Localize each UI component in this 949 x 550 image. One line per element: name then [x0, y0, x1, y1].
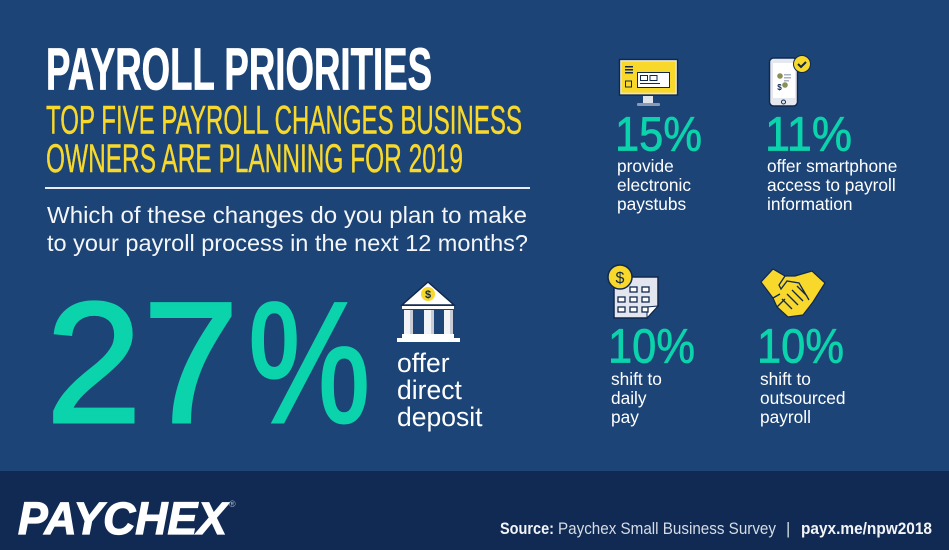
- stat: 10% outsourced payroll: [757, 320, 846, 427]
- stat: 15%: paystubs: [617, 194, 687, 214]
- stat: 15%: [615, 108, 702, 214]
- stat: 10% daily pay: [608, 320, 695, 427]
- stat: 10% outsourced payroll: payroll: [760, 407, 811, 427]
- question: to your payroll process in the next 12 months?: [47, 230, 528, 256]
- stat: 11%: 11%: [765, 108, 852, 162]
- stat: 15%: electronic: [617, 175, 691, 195]
- subtitle: TOP FIVE PAYROLL CHANGES BUSINESS: [46, 99, 522, 143]
- question: [47, 202, 528, 256]
- stat: 10% daily pay: shift to: [611, 369, 662, 389]
- icon: handshake: [761, 269, 825, 317]
- big stat: 27%: [46, 267, 370, 460]
- icon: calendar: $: [616, 270, 625, 287]
- subtitle: OWNERS ARE PLANNING FOR 2019: [46, 137, 463, 181]
- footer band: [0, 471, 949, 550]
- stat: 10% daily pay: 10%: [608, 320, 695, 374]
- stat: 11%: offer smartphone: [767, 156, 897, 176]
- stat: 10% outsourced payroll: outsourced: [760, 388, 846, 408]
- icon: smartphone: [770, 56, 810, 106]
- stat: 10% outsourced payroll: 10%: [757, 320, 844, 374]
- stat: 15%: 15%: [615, 108, 702, 162]
- label: direct deposit: offer: [397, 348, 450, 378]
- stat: 11%: access to payroll: [767, 175, 896, 195]
- icon: calendar: [608, 265, 658, 318]
- stat: 10% outsourced payroll: shift to: [760, 369, 811, 389]
- label: direct deposit: deposit: [397, 402, 483, 432]
- subtitle: [46, 99, 522, 181]
- icon: smartphone: $: [777, 83, 782, 92]
- logo: Paychex: ®: [229, 499, 236, 509]
- stat: 11%: information: [767, 194, 852, 214]
- stat: 15%: provide: [617, 156, 674, 176]
- stat: 11%: [765, 108, 897, 214]
- big stat: 27%: %: [248, 267, 370, 460]
- question: Which of these changes do you plan to make: [47, 202, 527, 228]
- source line: |: [786, 520, 790, 538]
- stat: 10% daily pay: pay: [611, 407, 639, 427]
- big stat: 27%: 2: [46, 267, 142, 459]
- stat: 10% daily pay: daily: [611, 388, 647, 408]
- source line: Paychex Small Business Survey: [558, 520, 777, 538]
- source line: [500, 520, 932, 538]
- icon: bank: [397, 282, 460, 342]
- title: PAYROLL PRIORITIES: [46, 36, 432, 102]
- source line: Source:: [500, 520, 554, 538]
- logo: Paychex: PAYCHEX: [18, 493, 230, 544]
- icon: monitor: [620, 60, 678, 106]
- source line: payx.me/npw2018: [801, 520, 932, 538]
- label: direct deposit: direct: [397, 375, 462, 405]
- label: direct deposit: [397, 348, 483, 432]
- big stat: 27%: 7: [143, 267, 239, 459]
- icon: bank: $: [425, 289, 431, 301]
